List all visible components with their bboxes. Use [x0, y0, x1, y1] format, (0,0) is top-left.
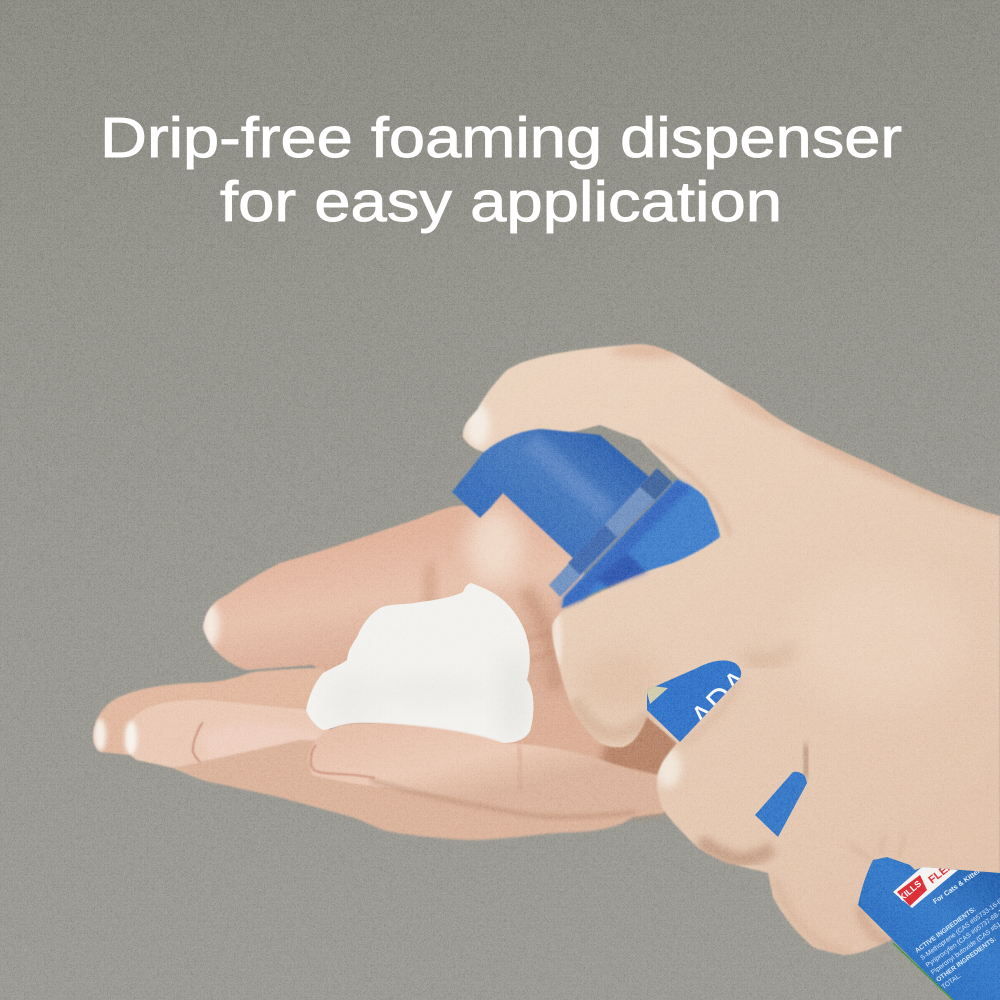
title: Drip-free foaming dispenser: [100, 106, 902, 170]
pump nozzle and stem: [452, 429, 660, 560]
upper pump crease: [650, 445, 730, 535]
thumb joint line: [518, 745, 521, 790]
left hand: lower fingers shading: [92, 717, 316, 758]
pet label text: For Cats & Kittens: [932, 865, 986, 906]
thumb lower crease: [370, 780, 635, 817]
finger two tip highlight: [655, 748, 681, 788]
left hand: lower palm band: [173, 740, 680, 840]
shoulder dark patch: [597, 553, 647, 587]
pump head: [452, 429, 720, 608]
ingredient list: OTHER INGREDIENTS:: [935, 936, 998, 984]
kills badge: KILLS: [897, 879, 923, 903]
dark crease at strip: [804, 745, 807, 778]
left hand: palm: [350, 488, 680, 817]
ingredient list: ACTIVE INGREDIENTS:: [914, 906, 977, 955]
title: for easy application: [220, 170, 782, 234]
left hand: little finger: [93, 668, 345, 780]
pump shoulder: [562, 480, 720, 608]
left hand: nail line one: [193, 722, 225, 770]
index fingertip highlight: [466, 403, 490, 447]
left hand: middle finger: [125, 700, 400, 833]
ingredient list: TOTAL:: [941, 972, 963, 991]
back of hand light: [818, 595, 939, 682]
finger one underside: [575, 700, 650, 734]
shaded knuckle area: [586, 654, 654, 706]
shoulder dark strip: [562, 480, 692, 608]
bottle lower with label: [858, 857, 1000, 1000]
pump highlight: [530, 440, 608, 512]
label white band: [893, 866, 958, 908]
tendon crease lines: [852, 838, 904, 860]
translucent collar: [549, 468, 672, 597]
left hand: index finger: [203, 488, 585, 700]
right hand: [463, 342, 1000, 955]
finger crease to strip: [684, 684, 740, 744]
left hand: [93, 488, 680, 840]
gap behind pump: [603, 435, 647, 465]
left hand: palm shadow near bottle: [600, 700, 680, 817]
finger one tip highlight: [552, 612, 562, 668]
bottle window middle: [755, 772, 807, 837]
thumb nail line: [311, 745, 375, 778]
bottle window upper: [647, 660, 742, 742]
bottle brand text: ADA: [683, 661, 760, 739]
lower finger two shadow: [700, 840, 772, 859]
left thumb: [308, 723, 665, 817]
lower finger three shadow: [775, 880, 850, 955]
knuckle redness: [612, 342, 688, 358]
title: [100, 106, 902, 234]
left hand: index shading: [201, 507, 560, 690]
flea label text: FLEA: [926, 859, 957, 886]
crease above bottle: [745, 645, 795, 662]
foam: [306, 583, 533, 743]
ingredient list: [916, 898, 1000, 988]
bottle inner cream edge: [647, 686, 668, 704]
bottle green edge: [893, 943, 953, 1000]
